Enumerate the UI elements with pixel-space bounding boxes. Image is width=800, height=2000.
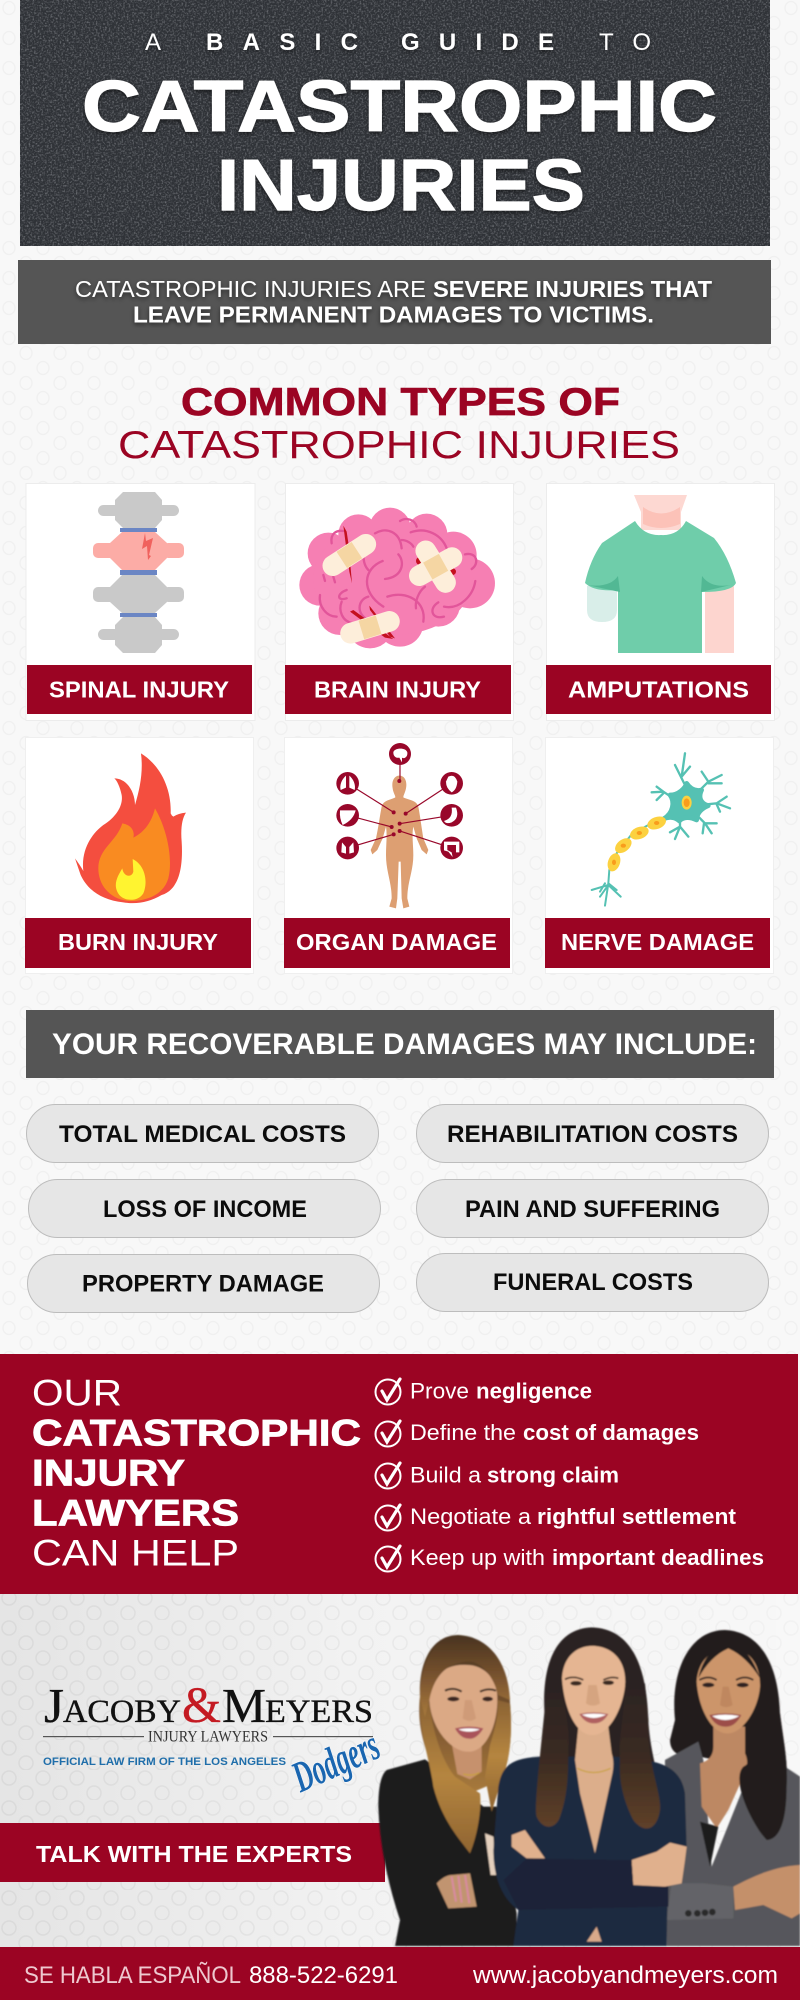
label: ORGAN DAMAGE bbox=[296, 929, 497, 955]
label bbox=[284, 918, 510, 968]
check item 1: Prove bbox=[410, 1378, 469, 1404]
check item 4: Negotiate a bbox=[410, 1504, 532, 1529]
check item 5 bbox=[376, 1545, 764, 1572]
logo wordmark: J bbox=[44, 1678, 64, 1733]
label: BURN INJURY bbox=[58, 929, 218, 955]
person: center lawyer bbox=[493, 1627, 687, 1946]
card: burn injury bbox=[25, 738, 254, 974]
firm logo bbox=[43, 1678, 387, 1802]
pill: loss of income: LOSS OF INCOME bbox=[103, 1196, 307, 1223]
check item 3: Build a bbox=[410, 1462, 482, 1488]
check item 3: strong claim bbox=[487, 1462, 619, 1488]
panel heading bbox=[32, 1372, 361, 1574]
call-to-action bar: TALK WITH THE EXPERTS bbox=[36, 1841, 352, 1867]
panel heading: LAWYERS bbox=[32, 1492, 239, 1534]
pill: rehabilitation costs: REHABILITATION COSTS bbox=[447, 1121, 738, 1148]
footer: spanish line: SE HABLA ESPAÑOL bbox=[24, 1962, 241, 1989]
damages pills bbox=[26, 1104, 768, 1312]
logo subline: INJURY LAWYERS bbox=[148, 1728, 268, 1746]
logo wordmark bbox=[44, 1678, 373, 1734]
pill: property damage: PROPERTY DAMAGE bbox=[82, 1270, 324, 1298]
section heading: common types bbox=[118, 381, 680, 467]
check item 3 bbox=[376, 1462, 619, 1488]
check item 4: rightful settlement bbox=[537, 1504, 737, 1529]
pill: pain and suffering: PAIN AND SUFFERING bbox=[465, 1196, 720, 1223]
definition text: SEVERE INJURIES THAT bbox=[433, 276, 713, 302]
label: BRAIN INJURY bbox=[314, 676, 481, 702]
footer: phone: 888-522-6291 bbox=[249, 1962, 398, 1989]
check item 2: Define the bbox=[410, 1420, 516, 1445]
header kicker text bbox=[145, 29, 651, 56]
label bbox=[27, 665, 252, 714]
pill: funeral costs bbox=[416, 1254, 768, 1312]
definition text bbox=[75, 276, 713, 328]
dodgers script: Dodgers bbox=[284, 1720, 387, 1802]
pill: rehabilitation costs bbox=[416, 1104, 768, 1162]
main title: CATASTROPHIC bbox=[82, 67, 717, 147]
footer: website: www.jacobyandmeyers.com bbox=[472, 1962, 778, 1989]
check item 5: important deadlines bbox=[552, 1545, 764, 1570]
panel heading: CATASTROPHIC bbox=[32, 1412, 361, 1454]
pill: total medical costs bbox=[26, 1104, 378, 1162]
definition band bbox=[18, 260, 771, 344]
person: left lawyer bbox=[378, 1635, 517, 1946]
section heading: common types: CATASTROPHIC INJURIES bbox=[118, 424, 680, 467]
photo: three lawyers bbox=[378, 1627, 800, 1946]
panel heading: OUR bbox=[32, 1372, 122, 1414]
icon: amputee torso bbox=[585, 495, 736, 653]
icon: spine bbox=[93, 492, 184, 653]
bottom textured section bbox=[0, 1594, 800, 1947]
icon: brain with bandages bbox=[299, 508, 495, 648]
card: brain injury bbox=[285, 484, 514, 720]
check item 1 bbox=[376, 1378, 592, 1404]
check item 1: negligence bbox=[476, 1378, 592, 1404]
checklist bbox=[376, 1378, 764, 1572]
logo wordmark: ACOBY bbox=[63, 1694, 181, 1730]
pill: funeral costs: FUNERAL COSTS bbox=[493, 1269, 693, 1296]
pill: pain and suffering bbox=[416, 1180, 768, 1238]
check item 2 bbox=[376, 1420, 699, 1446]
label: SPINAL INJURY bbox=[49, 676, 229, 702]
definition text: CATASTROPHIC INJURIES ARE bbox=[75, 276, 426, 302]
logo wordmark: & bbox=[182, 1678, 221, 1734]
label bbox=[545, 918, 770, 968]
header kicker text: BASIC bbox=[206, 29, 358, 56]
check item 4 bbox=[376, 1504, 737, 1530]
check item 5: Keep up with bbox=[410, 1545, 545, 1570]
header panel bbox=[20, 0, 770, 246]
label: NERVE DAMAGE bbox=[561, 929, 754, 955]
label bbox=[285, 665, 511, 714]
icon: body with organs bbox=[336, 743, 463, 908]
card: nerve damage bbox=[545, 738, 774, 974]
icon: flame bbox=[75, 753, 186, 903]
card: spinal injury bbox=[26, 484, 255, 720]
header kicker text: GUIDE bbox=[401, 29, 554, 56]
red panel: lawyers can help bbox=[0, 1354, 798, 1594]
official firm text: OFFICIAL LAW FIRM OF THE LOS ANGELES bbox=[43, 1756, 286, 1768]
definition text: LEAVE PERMANENT DAMAGES TO VICTIMS. bbox=[133, 302, 654, 328]
damages heading bar: YOUR RECOVERABLE DAMAGES MAY INCLUDE: bbox=[52, 1028, 757, 1061]
label bbox=[25, 918, 251, 968]
pill: total medical costs: TOTAL MEDICAL COSTS bbox=[59, 1121, 346, 1148]
logo wordmark: M bbox=[222, 1678, 266, 1733]
panel heading: INJURY bbox=[32, 1452, 185, 1494]
logo wordmark: EYERS bbox=[265, 1694, 373, 1730]
section heading: common types: COMMON TYPES OF bbox=[181, 381, 620, 424]
pill: loss of income bbox=[28, 1180, 380, 1238]
footer bar bbox=[0, 1947, 800, 2000]
label bbox=[546, 665, 771, 714]
label: AMPUTATIONS bbox=[568, 676, 749, 702]
call-to-action bar bbox=[0, 1823, 385, 1882]
header kicker text: TO bbox=[599, 29, 651, 56]
card: amputations bbox=[546, 484, 774, 720]
main title bbox=[82, 67, 717, 226]
pill: property damage bbox=[28, 1254, 380, 1312]
card: organ damage bbox=[284, 738, 512, 974]
person: right lawyer bbox=[665, 1630, 800, 1946]
check item 2: cost of damages bbox=[523, 1420, 699, 1445]
panel heading: CAN HELP bbox=[32, 1532, 239, 1574]
damages heading bar bbox=[26, 1010, 774, 1078]
header kicker text: A bbox=[145, 29, 161, 56]
main title: INJURIES bbox=[217, 146, 585, 226]
icon: neuron bbox=[592, 753, 730, 906]
